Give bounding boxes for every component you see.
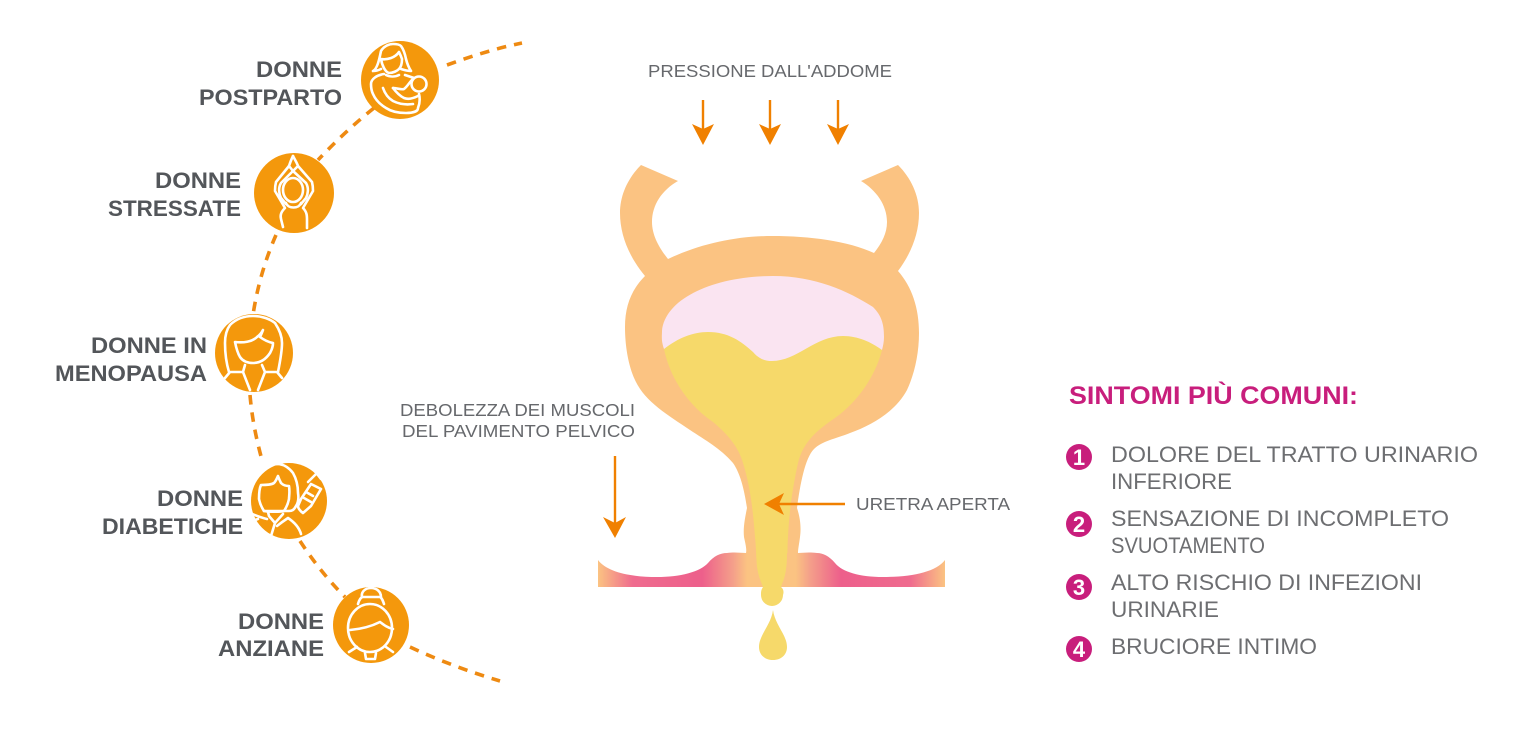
panel: symptoms — [1066, 380, 1478, 662]
pelvic floor muscle — [598, 553, 945, 587]
label: donne in menopausa: DONNE IN — [91, 333, 207, 358]
label: pelvic floor weakness: DEBOLEZZA DEI MUSCOLI — [400, 400, 635, 420]
symptom 4: BRUCIORE INTIMO — [1111, 634, 1317, 659]
label: uretra aperta: URETRA APERTA — [856, 494, 1010, 514]
item: donne anziane — [218, 587, 409, 663]
symptom 2: SENSAZIONE DI INCOMPLETO — [1111, 506, 1449, 531]
icon: woman with long hair — [215, 314, 293, 392]
label: donne diabetiche: DIABETICHE — [102, 514, 243, 539]
icon: elderly woman with bun — [333, 587, 409, 663]
label: donne postparto: POSTPARTO — [199, 85, 342, 110]
item: donne in menopausa — [55, 314, 293, 392]
symptom 3: URINARIE — [1111, 597, 1219, 622]
icon: woman with raised arms — [254, 153, 334, 233]
symptom 2: 2 — [1073, 512, 1085, 537]
symptom 3: ALTO RISCHIO DI INFEZIONI — [1111, 570, 1422, 595]
label: pelvic floor weakness — [400, 400, 635, 441]
bladder lumen — [662, 276, 884, 400]
item: donne postparto — [199, 41, 439, 119]
label: donne diabetiche — [102, 486, 243, 539]
symptom 1: INFERIORE — [1111, 469, 1232, 494]
label: donne stressate: STRESSATE — [108, 196, 241, 221]
arrows: abdominal pressure — [692, 100, 849, 145]
symptom 1 — [1066, 442, 1478, 494]
label: pelvic floor weakness: DEL PAVIMENTO PELVICO — [402, 421, 635, 441]
arrow: pelvic floor — [603, 456, 626, 538]
bladder wall — [620, 165, 919, 587]
urine drop — [759, 610, 787, 660]
label: donne postparto: DONNE — [256, 57, 342, 82]
heading: pressione dall'addome: PRESSIONE DALL'ADDOME — [648, 61, 892, 81]
symptom 2: SVUOTAMENTO — [1111, 533, 1265, 558]
symptom 1: 1 — [1073, 445, 1085, 470]
item: donne stressate — [108, 153, 334, 233]
label: donne anziane: ANZIANE — [218, 636, 324, 661]
symptom 3 — [1066, 570, 1422, 622]
arrow: open urethra — [764, 493, 845, 515]
symptom 2 — [1066, 506, 1449, 558]
symptom 3: 3 — [1073, 575, 1085, 600]
icon: mother with baby — [361, 41, 439, 119]
label: donne postparto — [199, 57, 342, 110]
label: donne in menopausa — [55, 333, 207, 386]
label: donne stressate: DONNE — [155, 168, 241, 193]
urine — [664, 332, 882, 606]
label: donne stressate — [108, 168, 241, 221]
item: donne diabetiche — [102, 463, 327, 539]
heading: sintomi più comuni: SINTOMI PIÙ COMUNI: — [1069, 380, 1358, 410]
symptom 1: DOLORE DEL TRATTO URINARIO — [1111, 442, 1478, 467]
label: donne in menopausa: MENOPAUSA — [55, 361, 207, 386]
label: donne anziane — [218, 609, 324, 661]
label: donne diabetiche: DONNE — [157, 486, 243, 511]
label: donne anziane: DONNE — [238, 609, 324, 634]
icon: woman with syringe — [251, 463, 327, 539]
diagram: bladder and urethra — [598, 165, 945, 660]
timeline dashed curve — [250, 43, 522, 681]
symptom 4: 4 — [1073, 637, 1086, 662]
